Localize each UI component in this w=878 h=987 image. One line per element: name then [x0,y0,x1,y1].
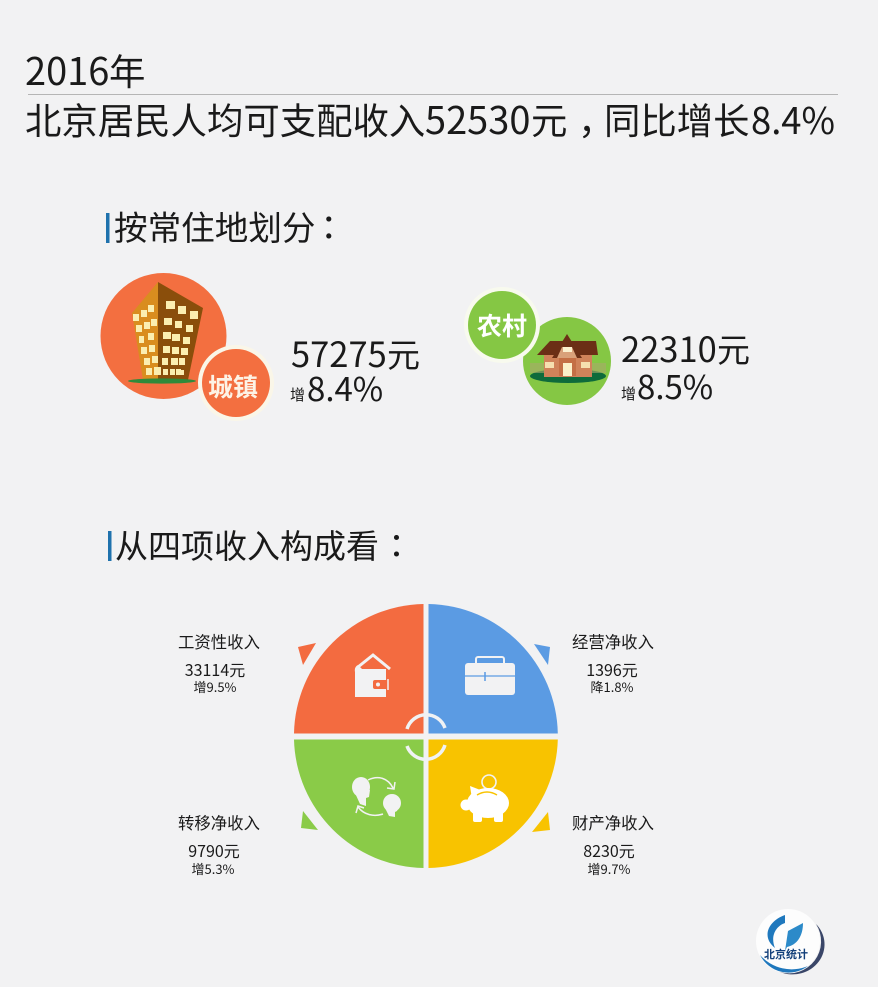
label: transfer: 9790元 [188,838,240,862]
urban value: 增 [290,384,305,405]
label: transfer [178,810,260,878]
pointer: property [532,812,550,832]
badge: urban [198,345,274,421]
label: transfer: 增5.3% [191,859,235,878]
icon: wallet [355,655,390,697]
logo: Beijing Statistics [756,909,825,974]
chart: income quadrants [294,604,558,868]
rural value: 增 [621,383,636,404]
pointer: transfer [301,811,318,830]
panel: rural income [464,287,750,409]
label: transfer: 转移净收入 [178,810,260,834]
urban value [290,327,420,411]
urban value: 57275 [291,327,387,377]
label: property [572,810,654,878]
title: 元 [531,93,567,145]
quadrant: property [428,740,558,868]
rural value: 元 [717,324,750,372]
label: business: 降1.8% [590,677,634,696]
label: property: 8230元 [583,838,635,862]
heading: by residence: 按常住地划分 [114,201,315,250]
pointer: wages [298,643,316,665]
badge: rural: 农村 [477,307,527,343]
icon: urban building [100,273,226,399]
label: business [572,629,654,696]
heading: by residence: ： [312,201,346,250]
icon: cycle arrows [407,715,445,759]
icon: rural house [523,317,611,405]
title: 同比增长 [604,93,750,145]
title: 8.4% [751,91,835,145]
label: property: 增9.7% [587,859,631,878]
label: wages [178,629,260,696]
rural value: 8.5% [637,361,713,409]
quadrant: transfer [294,740,424,868]
label: business: 经营净收入 [572,629,654,653]
badge: urban: 城镇 [208,368,258,404]
heading: four income sources: ： [380,520,413,568]
logo: Beijing Statistics: 北京统计 [764,946,808,962]
label: business: 1396元 [586,657,638,681]
quadrant: business [428,604,558,734]
title: 2016 [25,41,109,96]
panel: urban income [100,273,420,421]
icon: heads exchange [352,777,401,817]
urban value: 元 [387,329,420,377]
title: 北京居民人均可支配收入 [25,93,425,145]
heading: four income sources: 从四项收入构成看 [115,520,379,568]
urban value: 8.4% [307,363,383,411]
title: 年 [109,44,145,96]
badge: rural [464,287,540,363]
label: wages: 工资性收入 [178,629,260,653]
rural value: 22310 [621,322,717,372]
title: ， [578,93,614,145]
pointer: business [534,644,550,665]
title [25,41,835,145]
rural value [621,322,750,409]
icon: piggy bank [460,775,509,822]
title: 52530 [425,90,530,145]
icon: briefcase [465,657,515,695]
label: wages: 增9.5% [193,677,237,696]
label: property: 财产净收入 [572,810,654,834]
label: wages: 33114元 [185,657,245,681]
quadrant: wages [294,604,424,734]
